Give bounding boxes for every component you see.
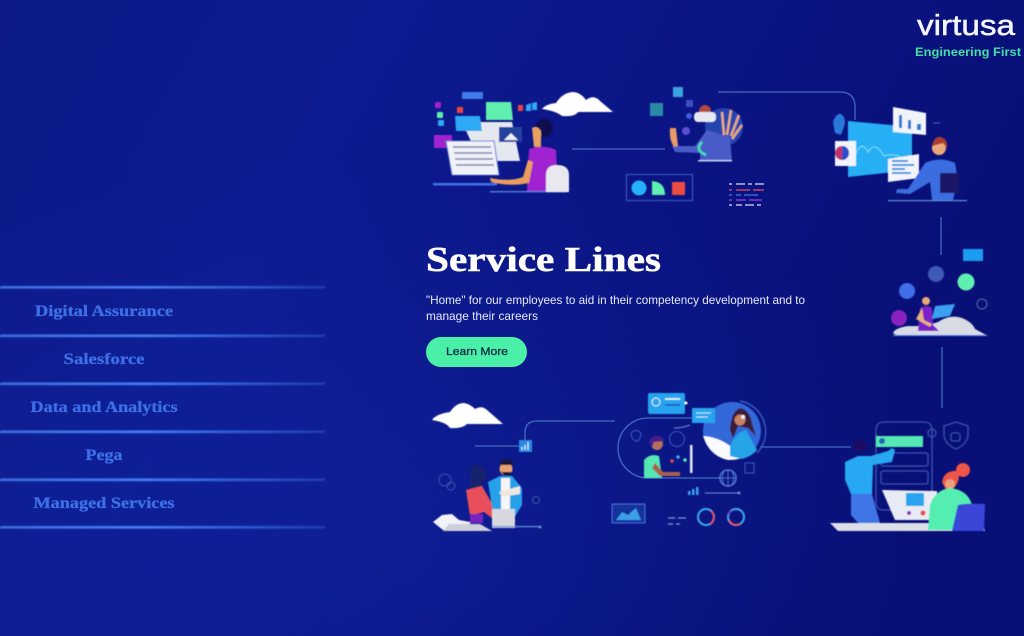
description text: manage their careers: [426, 309, 538, 323]
illustration: developer at desk: [433, 92, 569, 192]
icon: shapes box: [626, 174, 692, 200]
illustration: app designers: [830, 422, 985, 531]
panel: service line menu: Managed Services: [34, 495, 174, 512]
illustration: support agent: [612, 393, 766, 525]
illustration: VR person: [650, 87, 743, 162]
panel: service line menu: Digital Assurance: [35, 303, 173, 320]
button: learn more: [426, 337, 527, 367]
illustration: cloud learner: [891, 249, 988, 336]
description text: [426, 293, 805, 323]
panel: service line menu: Pega: [86, 447, 123, 464]
panel: service line menu: [0, 286, 325, 529]
icon: cloud lower: [432, 403, 503, 428]
illustration: analyst with dashboards: [833, 107, 967, 201]
logo: virtusa: [917, 10, 1016, 42]
illustration: colleagues with tablet: [433, 440, 542, 531]
panel: service line menu: Salesforce: [64, 351, 145, 368]
button: learn more: Learn More: [446, 346, 508, 358]
title: Service Lines: [426, 240, 661, 279]
icon: cloud top: [542, 92, 613, 116]
logo: [915, 10, 1021, 59]
logo: Engineering First: [915, 45, 1021, 59]
icon: code lines: [729, 184, 764, 205]
connector lines: [475, 92, 942, 478]
panel: service line menu: Data and Analytics: [30, 399, 178, 416]
description text: "Home" for our employees to aid in their competency development and to: [426, 293, 805, 307]
